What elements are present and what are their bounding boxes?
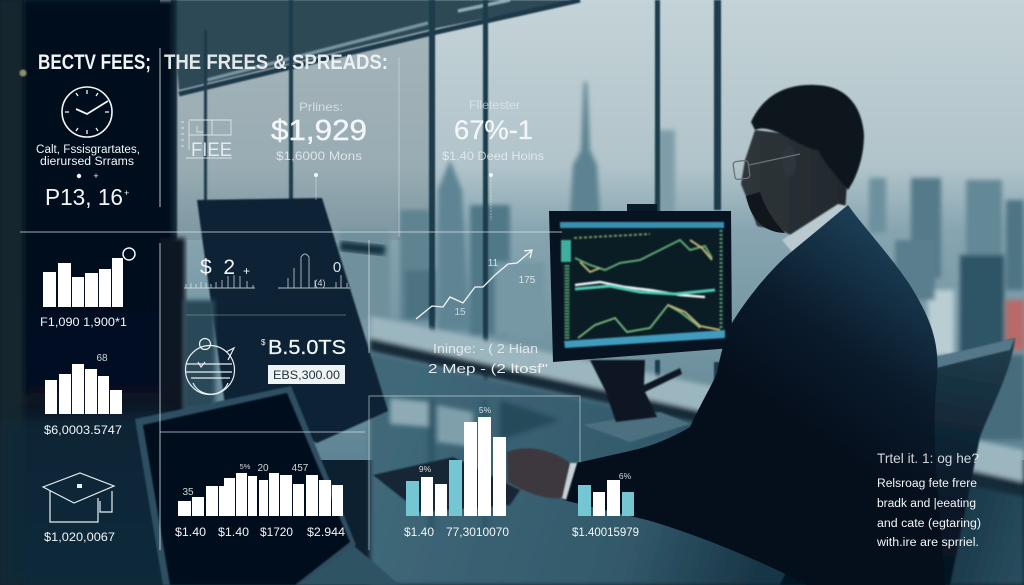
icon: clock	[62, 87, 112, 137]
open laptop	[135, 386, 356, 585]
mini charts: 0	[333, 259, 341, 276]
bar chart: bottom wide: $2.944	[307, 525, 345, 539]
shirt collar	[782, 204, 848, 252]
divider lines	[20, 48, 580, 550]
keyboard	[373, 457, 520, 512]
monitor with trading charts	[549, 204, 732, 442]
text block: explanation: and cate (egtaring)	[877, 518, 981, 530]
text block: explanation: Trtel it. 1: og he?	[877, 450, 979, 466]
icon: graduation cap: $1,020,0067	[44, 532, 115, 544]
bar chart: middle left	[44, 353, 122, 437]
desk surface	[370, 352, 1024, 585]
panel: clock stat: +	[124, 188, 129, 198]
bar chart: bottom wide	[175, 462, 345, 539]
text block: explanation	[876, 450, 981, 549]
chair	[780, 338, 1015, 585]
icon: smiling face	[186, 338, 234, 394]
panel: clock stat	[36, 87, 140, 210]
ceiling and top frame beams	[171, 0, 580, 94]
window sill and rail	[370, 316, 1024, 496]
shirt cuff	[560, 463, 577, 500]
hand on keyboard	[507, 448, 570, 498]
mini charts: (4)	[314, 278, 326, 288]
line chart: rising trend: 11	[488, 258, 499, 269]
stat: percentage: 67%-1	[454, 115, 533, 145]
mini charts: +	[243, 264, 250, 278]
panel: clock stat: +	[93, 171, 99, 181]
stat: amount with badge: $	[261, 338, 266, 347]
screen charts	[561, 230, 721, 340]
hair	[751, 85, 864, 190]
stat: amount with badge: B.5.0TS	[268, 336, 346, 359]
mini charts	[184, 254, 350, 315]
blurred city skyline	[340, 82, 1024, 440]
panel: clock stat: P13, 16	[45, 184, 123, 210]
bar chart: bottom wide: 5%	[240, 462, 251, 471]
text block: explanation: with.ire are sprriel.	[876, 537, 979, 549]
monitor stand	[583, 412, 690, 442]
text block: explanation: bradk and |eeating	[877, 498, 976, 510]
window glow dot	[20, 70, 26, 76]
icon: fee schedule	[181, 120, 232, 161]
bar chart: right small: 6%	[619, 471, 632, 481]
bar chart: central highlighted: $1.40	[404, 525, 434, 539]
webcam	[627, 204, 657, 213]
bar chart: central highlighted: 9%	[419, 464, 432, 474]
bar chart: right small: $1.40015979	[572, 525, 639, 539]
stat: price	[271, 100, 367, 200]
bar chart: middle left: 68	[96, 353, 108, 364]
bar chart: central highlighted: 5%	[479, 405, 492, 415]
bar chart: right small	[572, 471, 639, 539]
stat: amount with badge	[261, 336, 346, 384]
window sky	[160, 0, 1024, 460]
title: BECTV FEES;	[38, 51, 151, 74]
line chart: rising trend	[416, 250, 536, 319]
range note text	[428, 342, 548, 376]
line chart: rising trend: 175	[519, 275, 536, 286]
range note text: 2 Mep - (2 ltosf"	[428, 362, 548, 376]
monitor back	[197, 198, 388, 443]
bar chart: middle left: $6,0003.5747	[44, 425, 122, 437]
bar chart: bottom wide: 457	[292, 463, 309, 474]
monitor frame	[549, 211, 732, 362]
bar chart: upper left	[40, 248, 135, 329]
stat: percentage: Flletester	[469, 100, 520, 112]
icon: graduation cap	[43, 473, 115, 544]
stat: price: $1,929	[271, 115, 367, 147]
bar chart: bottom wide: 35	[182, 487, 194, 498]
mini charts: $ 2	[200, 256, 235, 279]
window mullions	[171, 0, 721, 400]
desk reflections	[390, 398, 560, 530]
title: THE FREES & SPREADS:	[164, 51, 388, 74]
monitor screen	[560, 221, 725, 348]
bar chart: bottom wide: $1.40	[175, 525, 206, 539]
line chart: rising trend: 15	[454, 307, 466, 318]
stat: price: Prlines:	[299, 100, 343, 114]
bar chart: upper left: F1,090 1,900*1	[40, 317, 127, 329]
range note text: Ininge: - ( 2 Hian	[433, 342, 538, 356]
stat: price: $1,6000 Mons	[276, 149, 362, 163]
stat: amount with badge: EBS,300.00	[273, 370, 340, 382]
panel: clock stat: Calt, Fssisgrartates,	[36, 144, 140, 156]
bar chart: central highlighted: 77,3010070	[446, 525, 509, 539]
bar chart: bottom wide: $1720	[260, 525, 293, 539]
bar chart: bottom wide: 20	[257, 463, 269, 474]
suit jacket	[563, 205, 945, 585]
beard	[746, 192, 785, 233]
glasses	[733, 154, 800, 180]
panel: clock stat: dierursed Srrams	[40, 156, 134, 168]
ear	[782, 145, 796, 177]
laptop base	[297, 545, 400, 585]
person at desk	[507, 85, 1015, 585]
bar chart: central highlighted	[404, 405, 509, 539]
bar chart: bottom wide: $1.40	[218, 525, 249, 539]
stat: percentage: $1.40 Deed Hoins	[442, 149, 544, 163]
left dark panel	[0, 0, 28, 585]
title	[38, 51, 388, 74]
icon: fee schedule: FIEE	[191, 140, 232, 161]
stat: percentage	[442, 100, 544, 220]
text block: explanation: Relsroag fete frere	[877, 478, 977, 490]
neck and face	[741, 130, 848, 240]
